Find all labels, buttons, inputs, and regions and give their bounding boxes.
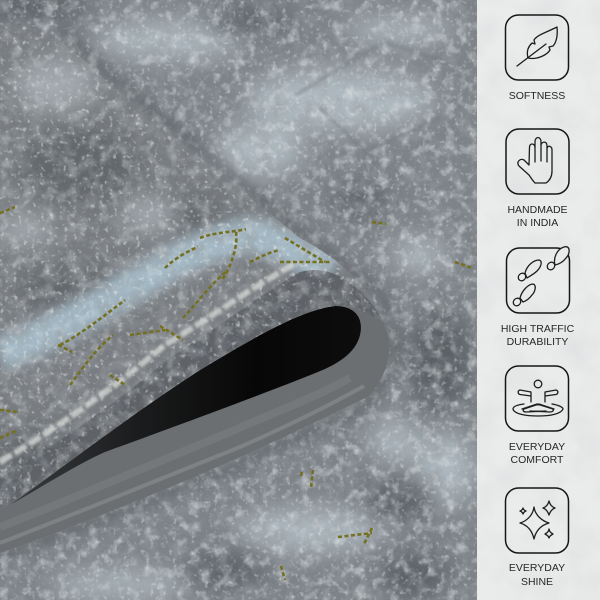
- shadow cast by the roll: [0, 30, 396, 558]
- grey lip of the roll: [0, 270, 388, 520]
- gold vine pattern: [0, 207, 330, 438]
- feature: everyday comfort: EVERYDAY: [509, 441, 565, 453]
- dark pocket of the fold: [10, 306, 361, 505]
- feature: everyday shine: EVERYDAY: [509, 562, 565, 574]
- feature: handmade in india: HANDMADE: [507, 204, 568, 216]
- feature: everyday comfort: [506, 366, 568, 466]
- feature: high traffic durability: HIGH TRAFFIC: [501, 323, 575, 335]
- feature: everyday comfort: COMFORT: [511, 454, 564, 466]
- feature: high traffic durability: [501, 247, 575, 348]
- rug photograph: [0, 0, 477, 600]
- feature: softness: [506, 15, 568, 102]
- panel: features sidebar: [477, 0, 600, 600]
- icon: sparkles: [520, 501, 555, 539]
- icon: hand: [518, 138, 552, 183]
- feature: handmade in india: [506, 129, 569, 229]
- cream border line: [0, 262, 298, 462]
- feature: high traffic durability: DURABILITY: [507, 336, 568, 348]
- feature: everyday shine: [506, 488, 568, 588]
- gold accents on flat rug: [281, 222, 472, 580]
- feature: handmade in india: IN INDIA: [517, 217, 558, 229]
- feature: everyday shine: SHINE: [521, 576, 553, 588]
- rolled rug top: [0, 26, 385, 506]
- blue border band: [0, 235, 330, 355]
- icon: meditating figure: [513, 380, 563, 416]
- icon: feather: [517, 27, 557, 66]
- underside band of the rug: [0, 299, 389, 553]
- flat rug surface: [0, 0, 477, 600]
- icon: footprints: [512, 247, 569, 307]
- feature: softness: SOFTNESS: [509, 90, 565, 102]
